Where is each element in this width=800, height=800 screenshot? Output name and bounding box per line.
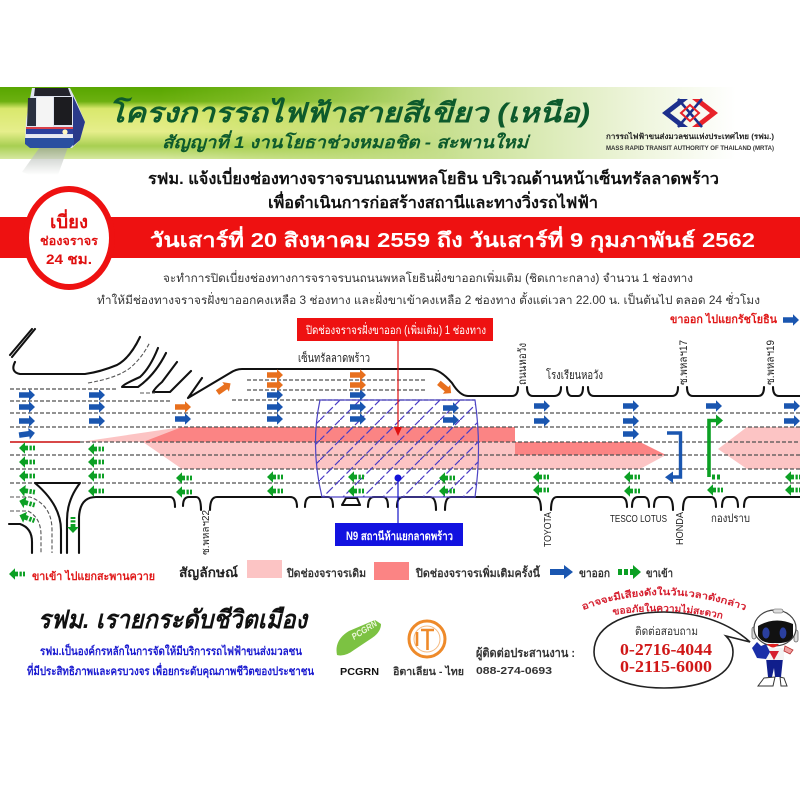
MRTA logo: [606, 99, 775, 152]
road labels: HONDA: [675, 512, 686, 545]
station hatched zone: [315, 400, 478, 497]
icon: train: [22, 88, 85, 175]
announcement heading: เพื่อดำเนินการก่อสร้างสถานีและทางวิ่งรถไฟฟ้า: [268, 191, 598, 212]
callout: N9 station: [335, 474, 463, 546]
road labels: ซ.พหลฯ17: [678, 340, 690, 385]
coordinator contact: ผู้ติดต่อประสานงาน :: [476, 646, 575, 661]
inbound green arrows: [17, 442, 800, 533]
legend: สัญลักษณ์: [179, 565, 238, 581]
road labels: TOYOTA: [543, 512, 554, 547]
callout: N9 station: N9 สถานีห้าแยกลาดพร้าว: [346, 530, 453, 543]
title: โครงการรถไฟฟ้าสายสีเขียว (เหนือ): [108, 96, 590, 128]
slogan: รฟม. เรายกระดับชีวิตเมือง: [38, 606, 309, 634]
road labels: เซ็นทรัลลาดพร้าว: [298, 350, 370, 365]
road labels: กองปราบ: [711, 513, 750, 525]
legend: [179, 560, 673, 581]
legend: ขาเข้า: [646, 567, 673, 580]
blue U-turn bracket arrow: [665, 433, 680, 483]
PCGRN logo: PCGRN: [350, 618, 379, 642]
callout: additional closure: ปิดช่องจราจรฝั่งขาออก (เพิ่มเติม) 1 ช่องทาง: [305, 322, 486, 337]
description text: ทำให้มีช่องทางจราจรฝั่งขาออกคงเหลือ 3 ช่องทาง และฝั่งขาเข้าคงเหลือ 2 ช่องทาง ตั้งแต่เวลา 22.00 น. เป็นต้นไป ตลอด 24 ชั่วโมง: [97, 292, 760, 307]
direction label: inbound: [9, 568, 155, 583]
road edges: [9, 329, 800, 553]
closed lanes: additional closure: [143, 427, 666, 455]
red circle badge: ช่องจราจร: [40, 234, 99, 248]
red circle badge: [26, 189, 112, 287]
red circle badge: เบี่ยง: [50, 209, 88, 232]
callout: additional closure: [297, 318, 493, 436]
description text: [97, 270, 760, 307]
outbound blue arrows: [18, 389, 800, 441]
speech bubble contact: 0-2115-6000: [620, 657, 712, 676]
orange lane-merge arrows: [175, 369, 455, 413]
coordinator contact: 088-274-0693: [476, 666, 553, 677]
mission text: รฟม.เป็นองค์กรหลักในการจัดให้มีบริการรถไฟฟ้าขนส่งมวลชน: [40, 643, 302, 658]
closed lanes: existing closure: [80, 427, 800, 469]
logo text English: MASS RAPID TRANSIT AUTHORITY OF THAILAND (MRTA): [606, 145, 774, 152]
legend: ขาออก: [579, 568, 610, 580]
road labels: โรงเรียนหอวัง: [546, 368, 603, 382]
green U-turn bracket arrow: [709, 414, 723, 480]
announcement heading: [148, 167, 719, 212]
red date band: [0, 217, 800, 258]
legend: ปิดช่องจราจรเพิ่มเติมครั้งนี้: [415, 565, 541, 580]
legend: ปิดช่องจราจรเดิม: [286, 567, 366, 580]
description text: จะทำการปิดเบี่ยงช่องทางการจราจรบนถนนพหลโยธินฝั่งขาออกเพิ่มเติม (ชิดเกาะกลาง) จำนวน 1 ช่องทาง: [163, 270, 693, 285]
subtitle: สัญญาที่ 1 งานโยธาช่วงหมอชิต - สะพานใหม่: [162, 130, 531, 153]
speech bubble contact: 0-2716-4044: [620, 640, 712, 659]
mission text: [27, 643, 314, 679]
road labels: TESCO LOTUS: [610, 514, 667, 525]
apology curved text: ขออภัยในความไม่สะดวก: [612, 602, 722, 619]
header banner: [0, 87, 800, 175]
red date band: วันเสาร์ที่ 20 สิงหาคม 2559 ถึง วันเสาร์ที่ 9 กุมภาพันธ์ 2562: [150, 225, 755, 253]
road labels: ซ.พหลฯ19: [765, 340, 777, 385]
PCGRN logo: PCGRN: [340, 666, 379, 678]
road diagram: [9, 312, 800, 555]
Italian-Thai logo: [392, 621, 464, 678]
road labels: ซ.พหลฯ22: [201, 510, 212, 555]
speech bubble contact: [594, 612, 750, 688]
speech bubble contact: ติดต่อสอบถาม: [635, 625, 698, 638]
road labels: [201, 340, 777, 555]
red circle badge: 24 ชม.: [46, 251, 92, 267]
apology curved text: อาจจะมีเสียงดังในวันเวลาดังกล่าว: [582, 586, 746, 610]
Italian-Thai logo: อิตาเลียน - ไทย: [392, 665, 464, 678]
direction label: inbound: ขาเข้า ไปแยกสะพานควาย: [32, 569, 155, 583]
coordinator contact: [476, 646, 575, 677]
PCGRN logo: [336, 618, 381, 678]
announcement heading: รฟม. แจ้งเบี่ยงช่องทางจราจรบนถนนพหลโยธิน บริเวณด้านหน้าเซ็นทรัลลาดพร้าว: [148, 167, 719, 188]
road labels: ถนนหอวัง: [517, 343, 529, 385]
logo text Thai: การรถไฟฟ้าขนส่งมวลชนแห่งประเทศไทย (รฟม.): [606, 131, 775, 141]
mascot: [752, 609, 798, 686]
mission text: ที่มีประสิทธิภาพและครบวงจร เพื่อยกระดับคุณภาพชีวิตของประชาชน: [27, 662, 314, 679]
direction label: outbound: ขาออก ไปแยกรัชโยธิน: [670, 312, 777, 326]
